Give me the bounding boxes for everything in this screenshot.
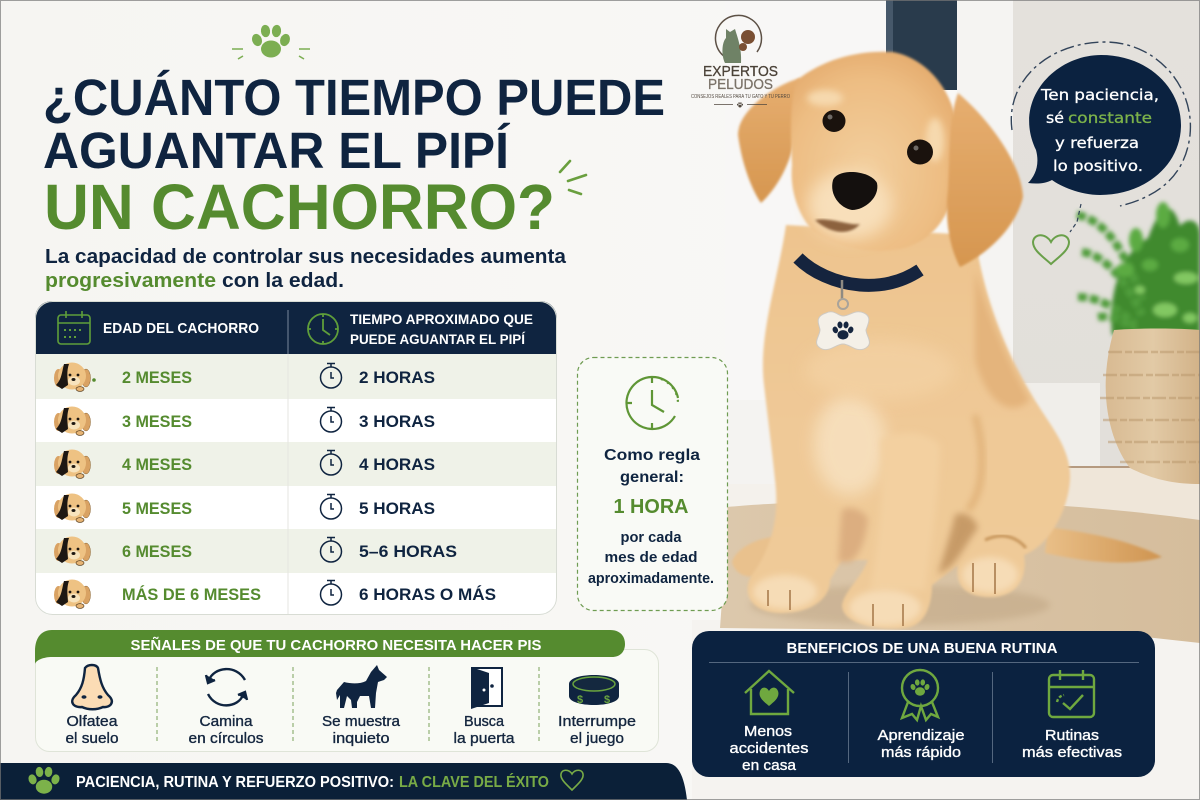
puppy mouth bbox=[815, 219, 860, 232]
table: age vs time bbox=[35, 301, 557, 615]
row: más de 6 meses bbox=[54, 580, 496, 608]
puppy muzzle bbox=[808, 171, 892, 239]
callout: general rule: 1 HORA bbox=[614, 496, 688, 518]
puppy head bbox=[791, 52, 958, 251]
puppy photo bbox=[732, 52, 1162, 628]
label: busca: Busca bbox=[464, 714, 505, 730]
label: inquieto: Se muestra bbox=[322, 714, 401, 730]
label: menos accidentes bbox=[730, 723, 808, 774]
logo: expertos peludos: CONSEJOS REALES PARA TU GATO Y TU PERRO bbox=[691, 94, 790, 100]
puppy right side shading bbox=[975, 270, 1030, 408]
puppy tail bbox=[1045, 527, 1162, 563]
icon: nose bbox=[72, 665, 112, 709]
speech bubble bbox=[1011, 42, 1190, 206]
puppy collar bbox=[798, 258, 920, 285]
speech bubble: constante bbox=[1068, 109, 1152, 127]
logo: expertos peludos: EXPERTOS bbox=[703, 63, 778, 80]
label: inquieto bbox=[322, 714, 401, 747]
icon: paw bbox=[27, 767, 61, 794]
row: 6 meses: 6 MESES bbox=[122, 543, 192, 561]
label: menos accidentes: accidentes bbox=[730, 740, 808, 757]
logo: expertos peludos bbox=[691, 15, 790, 107]
icon: bowl: $ bbox=[604, 694, 610, 706]
icon: green clock bbox=[308, 314, 338, 344]
photo: room background bbox=[692, 0, 1200, 800]
row: 4 meses: 4 MESES bbox=[122, 456, 192, 474]
icon: door bbox=[471, 667, 502, 709]
icon: calendar bbox=[58, 311, 90, 344]
label: menos accidentes: en casa bbox=[742, 757, 797, 774]
row: 5 meses: 5 HORAS bbox=[359, 500, 435, 518]
label: rutinas: más efectivas bbox=[1022, 744, 1122, 761]
logo: expertos peludos: PELUDOS bbox=[708, 76, 773, 93]
speech bubble: sé bbox=[1046, 109, 1064, 127]
row: 5 meses: 5 MESES bbox=[122, 500, 192, 518]
icon: bowl: $ bbox=[577, 694, 583, 706]
icon: calendar check bbox=[1049, 670, 1094, 717]
label: busca bbox=[454, 714, 516, 747]
title bbox=[43, 69, 665, 243]
puppy haunch edge bbox=[968, 415, 982, 510]
subtitle: con la edad. bbox=[222, 270, 344, 292]
label: camina bbox=[188, 714, 264, 747]
puppy nose bbox=[832, 172, 877, 210]
icon: clock bbox=[626, 377, 678, 429]
panel: signals bbox=[35, 630, 658, 752]
row: 4 meses: 4 HORAS bbox=[359, 456, 435, 474]
puppy belly gap bbox=[838, 508, 868, 562]
puppy chest bbox=[814, 395, 886, 495]
puppy ruff bbox=[805, 340, 955, 400]
label: olfatea: el suelo bbox=[66, 731, 118, 747]
icon: small heart bbox=[1033, 204, 1081, 264]
label: olfatea bbox=[66, 714, 119, 747]
footer banner: PACIENCIA, RUTINA Y REFUERZO POSITIVO: bbox=[76, 774, 394, 791]
puppy back paw bbox=[732, 537, 775, 577]
puppy paw highlights bbox=[849, 590, 921, 626]
signals heading bbox=[35, 630, 625, 664]
title: UN CACHORRO? bbox=[44, 171, 555, 243]
panel: benefits: BENEFICIOS DE UNA BUENA RUTINA bbox=[786, 640, 1058, 657]
title: AGUANTAR EL PIPÍ bbox=[43, 122, 511, 179]
panel: benefits bbox=[692, 631, 1155, 777]
speech bubble: Ten paciencia, bbox=[1040, 86, 1159, 104]
callout: general rule: general: bbox=[620, 469, 684, 486]
label: interrumpe: Interrumpe bbox=[558, 714, 636, 730]
icon: heart bbox=[561, 770, 583, 790]
label: camina: Camina bbox=[200, 714, 253, 730]
decorative top paw bbox=[232, 24, 310, 59]
label: camina: en círculos bbox=[188, 731, 264, 747]
speech bubble: lo positivo. bbox=[1053, 157, 1143, 175]
dog tag bbox=[817, 280, 869, 350]
callout: general rule: Como regla bbox=[604, 447, 700, 464]
rug shadow bbox=[750, 585, 1050, 625]
puppy right ear bbox=[947, 93, 1023, 267]
callout: general rule: por cada bbox=[620, 530, 682, 546]
row: 6 meses: 5–6 HORAS bbox=[359, 543, 457, 561]
label: rutinas bbox=[1022, 727, 1122, 761]
row: 6 meses bbox=[54, 536, 457, 565]
speech bubble: y refuerza bbox=[1055, 134, 1139, 152]
puppy body bbox=[748, 225, 1070, 628]
row: 5 meses bbox=[54, 494, 435, 522]
subtitle bbox=[45, 246, 567, 292]
signals heading: SEÑALES DE QUE TU CACHORRO NECESITA HACER PIS bbox=[130, 636, 542, 654]
label: interrumpe: el juego bbox=[570, 731, 624, 747]
label: aprendizaje: más rápido bbox=[881, 744, 961, 761]
row: 2 meses bbox=[54, 362, 435, 391]
puppy eyes bbox=[822, 110, 933, 164]
row: 3 meses bbox=[54, 406, 435, 435]
callout: general rule: aproximadamente. bbox=[588, 571, 714, 587]
row: más de 6 meses: MÁS DE 6 MESES bbox=[122, 585, 261, 604]
row: 2 meses: 2 HORAS bbox=[359, 369, 435, 387]
header: time: PUEDE AGUANTAR EL PIPÍ bbox=[350, 332, 526, 347]
header: time: TIEMPO APROXIMADO QUE bbox=[350, 312, 533, 327]
row: 4 meses bbox=[54, 450, 435, 478]
icon: house with heart bbox=[745, 671, 794, 714]
plant in basket bbox=[1077, 202, 1200, 484]
title: ¿CUÁNTO TIEMPO PUEDE bbox=[43, 69, 665, 126]
callout: general rule bbox=[578, 358, 728, 610]
row: 3 meses: 3 MESES bbox=[122, 413, 192, 431]
footer banner: LA CLAVE DEL ÉXITO bbox=[399, 774, 549, 791]
title spark bbox=[560, 161, 586, 194]
header: time bbox=[350, 312, 533, 347]
label: aprendizaje: Aprendizaje bbox=[878, 727, 964, 744]
puppy brows bbox=[807, 90, 843, 106]
row: más de 6 meses: 6 HORAS O MÁS bbox=[359, 585, 496, 604]
icon: circular arrows bbox=[206, 669, 247, 705]
label: rutinas: Rutinas bbox=[1045, 727, 1099, 744]
label: menos accidentes: Menos bbox=[744, 723, 792, 740]
label: inquieto: inquieto bbox=[332, 731, 390, 747]
puppy leg shadow bbox=[938, 513, 978, 575]
footer banner bbox=[0, 763, 687, 800]
puppy left ear bbox=[738, 78, 803, 203]
subtitle: La capacidad de controlar sus necesidades aumenta bbox=[45, 246, 567, 268]
label: aprendizaje bbox=[878, 727, 964, 761]
row: 2 meses: 2 MESES bbox=[122, 369, 192, 387]
puppy foreleg highlight bbox=[870, 433, 940, 590]
label: interrumpe bbox=[558, 714, 636, 747]
callout: general rule: mes de edad bbox=[604, 550, 698, 566]
row: 3 meses: 3 HORAS bbox=[359, 413, 435, 431]
label: olfatea: Olfatea bbox=[66, 714, 119, 730]
icon: paw ribbon bbox=[902, 670, 938, 720]
header: age: EDAD DEL CACHORRO bbox=[103, 321, 259, 337]
puppy toes bbox=[768, 563, 995, 626]
label: busca: la puerta bbox=[454, 731, 516, 747]
icon: bowl bbox=[569, 675, 619, 706]
subtitle: progresivamente bbox=[45, 270, 216, 292]
icon: restless dog bbox=[336, 665, 387, 708]
